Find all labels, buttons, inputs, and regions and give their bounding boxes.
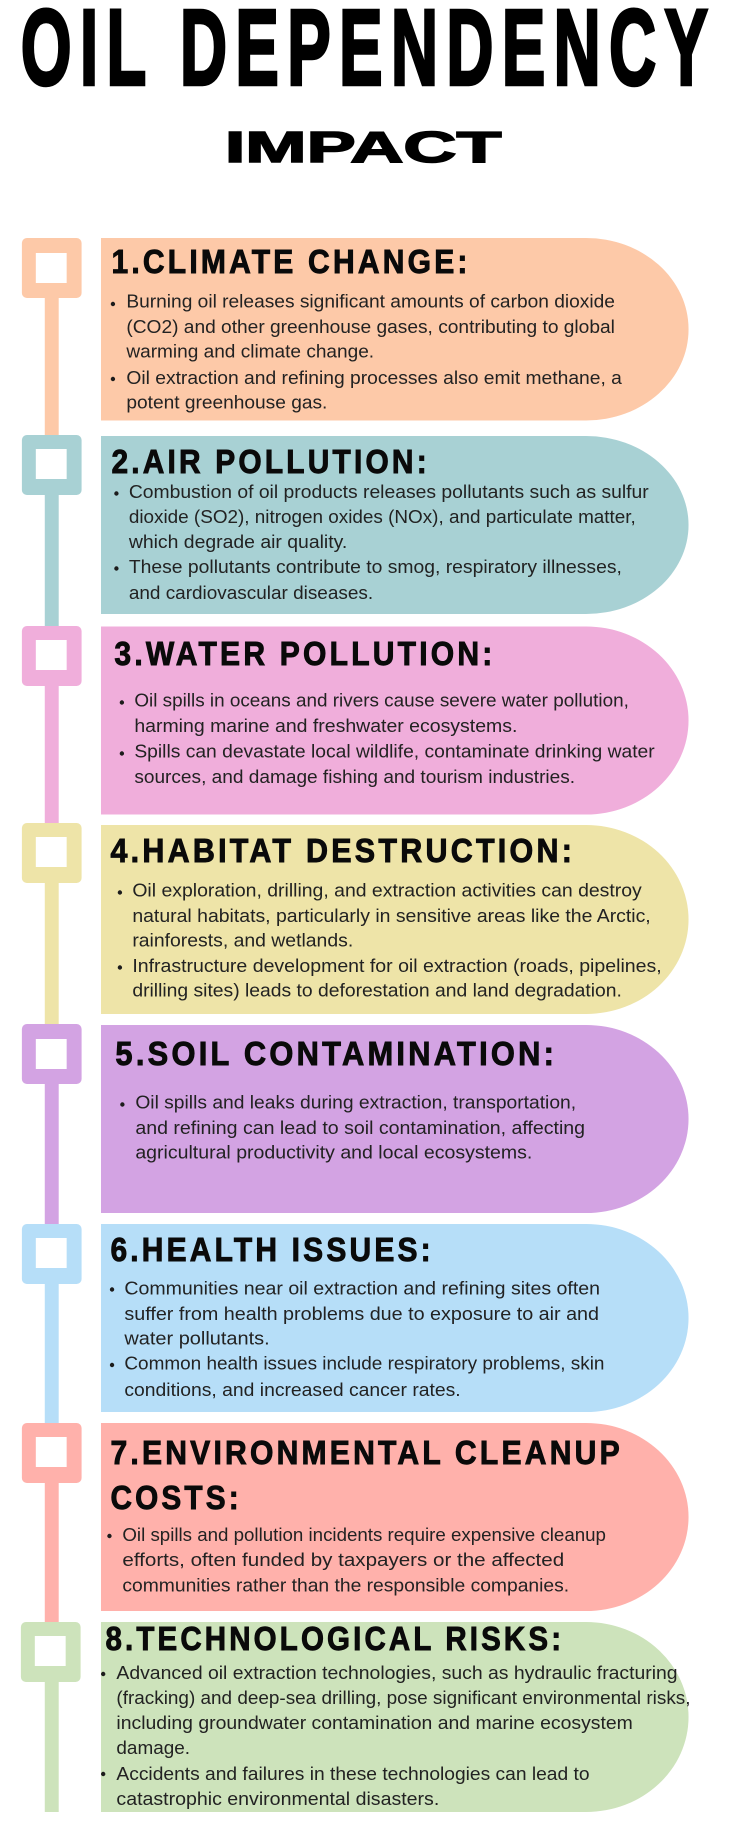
panel: air pollution — [101, 436, 689, 614]
bullets 4: Oil exploration, drilling, and extraction activities can destroy — [132, 879, 643, 901]
panel 2 background — [101, 436, 689, 614]
bullets 4: drilling sites) leads to deforestation and land degradation. — [132, 979, 622, 1001]
bullets 1: Burning oil releases significant amounts of carbon dioxide — [126, 290, 615, 312]
panel 5 background — [101, 1025, 689, 1213]
timeline marker 8 — [21, 1622, 81, 1812]
heading 3: 3.WATER POLLUTION: — [114, 635, 496, 672]
heading 1: 1.CLIMATE CHANGE: — [111, 243, 471, 280]
bullets 6: Common health issues include respiratory problems, skin — [124, 1352, 604, 1374]
timeline marker 2 — [22, 435, 82, 627]
bullets 5: Oil spills and leaks during extraction, transportation, — [135, 1091, 576, 1113]
bullets 8: including groundwater contamination and marine ecosystem — [116, 1712, 633, 1733]
bullets 3: Oil spills in oceans and rivers cause severe water pollution, — [134, 689, 629, 711]
bullets 7: efforts, often funded by taxpayers or the affected — [122, 1549, 564, 1570]
panel: technological risks — [101, 1620, 691, 1812]
bullets 7: communities rather than the responsible companies. — [122, 1574, 569, 1596]
bullets 5 — [120, 1091, 585, 1163]
bullets 2: and cardiovascular diseases. — [129, 582, 373, 603]
panel 8 background — [101, 1622, 689, 1812]
bullets 6: suffer from health problems due to exposure to air and — [124, 1303, 599, 1324]
bullets 7: Oil spills and pollution incidents require expensive cleanup — [122, 1524, 606, 1545]
bullets 4: Infrastructure development for oil extraction (roads, pipelines, — [132, 955, 662, 976]
heading 7: COSTS: — [110, 1479, 242, 1516]
bullets 8: Accidents and failures in these technologies can lead to — [116, 1763, 590, 1784]
timeline marker 7 — [22, 1423, 82, 1623]
panel: soil contamination — [101, 1025, 689, 1213]
heading 8: 8.TECHNOLOGICAL RISKS: — [105, 1620, 564, 1657]
timeline marker 4 — [22, 823, 82, 1025]
subtitle: IMPACT — [225, 123, 502, 172]
bullets 1: potent greenhouse gas. — [126, 391, 327, 413]
bullets 8 — [101, 1662, 691, 1809]
bullets 2 — [114, 481, 649, 603]
bullets 8: catastrophic environmental disasters. — [116, 1788, 439, 1809]
bullets 3: harming marine and freshwater ecosystems. — [134, 715, 517, 736]
bullets 4: natural habitats, particularly in sensitive areas like the Arctic, — [132, 905, 651, 926]
panel: environmental cleanup costs — [101, 1423, 689, 1611]
bullets 6: Communities near oil extraction and refining sites often — [124, 1277, 600, 1299]
panel 4 background — [101, 825, 689, 1014]
bullets 7 — [107, 1524, 606, 1596]
panel 7 background — [101, 1423, 689, 1611]
panel: habitat destruction — [101, 825, 689, 1014]
heading 6: 6.HEALTH ISSUES: — [110, 1231, 434, 1268]
panel 1 background — [101, 238, 689, 420]
bullets 8: damage. — [116, 1737, 190, 1758]
panel 6 background — [101, 1224, 689, 1412]
bullets 8: Advanced oil extraction technologies, such as hydraulic fracturing — [116, 1662, 678, 1683]
bullets 5: agricultural productivity and local ecosystems. — [135, 1141, 532, 1163]
bullets 4 — [118, 879, 662, 1001]
bullets 1 — [111, 290, 623, 413]
bullets 6: conditions, and increased cancer rates. — [124, 1379, 461, 1400]
bullets 4: rainforests, and wetlands. — [132, 929, 353, 951]
bullets 2: Combustion of oil products releases pollutants such as sulfur — [129, 481, 649, 502]
bullets 2: which degrade air quality. — [128, 531, 347, 552]
bullets 1: Oil extraction and refining processes also emit methane, a — [126, 367, 623, 388]
bullets 2: dioxide (SO2), nitrogen oxides (NOx), and particulate matter, — [129, 506, 636, 527]
bullets 3 — [120, 689, 655, 787]
timeline marker 3 — [22, 626, 82, 824]
heading 5: 5.SOIL CONTAMINATION: — [115, 1035, 557, 1072]
panel: health issues — [101, 1224, 689, 1412]
bullets 6: water pollutants. — [123, 1327, 270, 1349]
timeline marker 1 — [22, 238, 82, 436]
timeline marker 5 — [22, 1024, 82, 1225]
panel: water pollution — [101, 626, 689, 814]
bullets 3: sources, and damage fishing and tourism industries. — [134, 766, 575, 787]
heading 7 — [110, 1434, 623, 1516]
bullets 3: Spills can devastate local wildlife, contaminate drinking water — [134, 740, 655, 762]
bullets 1: warming and climate change. — [125, 340, 374, 362]
bullets 6 — [110, 1277, 604, 1400]
bullets 1: (CO2) and other greenhouse gases, contributing to global — [126, 316, 615, 337]
heading 4: 4.HABITAT DESTRUCTION: — [110, 832, 575, 869]
bullets 5: and refining can lead to soil contamination, affecting — [135, 1117, 585, 1138]
timeline marker 6 — [22, 1224, 82, 1424]
panel 3 background — [101, 626, 689, 814]
heading 2: 2.AIR POLLUTION: — [111, 443, 430, 480]
panel: climate change — [101, 238, 689, 420]
bullets 8: (fracking) and deep-sea drilling, pose significant environmental risks, — [116, 1687, 691, 1708]
bullets 2: These pollutants contribute to smog, respiratory illnesses, — [129, 556, 622, 577]
heading 7: 7.ENVIRONMENTAL CLEANUP — [110, 1434, 623, 1471]
